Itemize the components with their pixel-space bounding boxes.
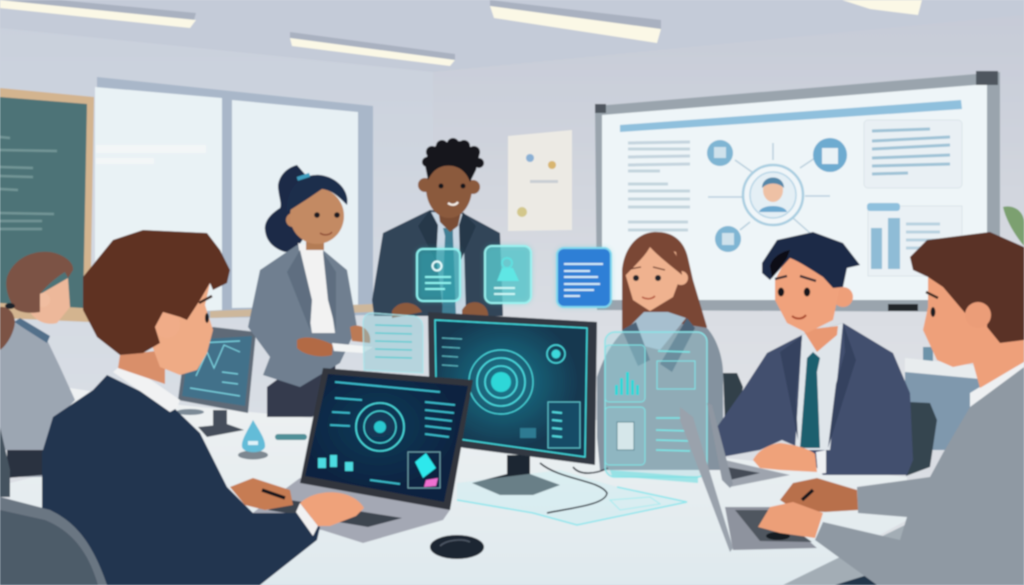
slide bar chart bbox=[867, 203, 962, 276]
back hand with pen bbox=[230, 478, 293, 510]
slide network diagram bbox=[707, 138, 847, 252]
whiteboard bbox=[595, 71, 1000, 312]
poster on wall bbox=[508, 130, 572, 231]
front hand on keyboard bbox=[296, 492, 364, 536]
mouse bbox=[430, 535, 484, 559]
right front laptop bbox=[680, 407, 817, 552]
floating card: lock bbox=[485, 246, 531, 303]
water drop icon bbox=[238, 420, 307, 460]
person: standing man with curly hair bbox=[372, 138, 503, 318]
chalkboard bbox=[0, 88, 94, 322]
slide text box bbox=[864, 120, 962, 188]
floating holographic panel bbox=[605, 332, 707, 483]
floating card: text translucent bbox=[363, 313, 423, 373]
foreground chair bbox=[0, 497, 107, 585]
monitor cable bbox=[540, 463, 608, 513]
person: far left seated woman bbox=[0, 252, 75, 497]
slide banner bbox=[620, 100, 962, 132]
person: right foreground man bbox=[758, 232, 1024, 585]
chair backs bbox=[723, 373, 937, 476]
ceiling lights bbox=[0, 0, 922, 66]
right middle laptop bbox=[707, 403, 826, 488]
person: left foreground man bbox=[42, 230, 364, 585]
person: standing woman with ponytail bbox=[248, 165, 373, 417]
slide bullets bbox=[628, 142, 690, 230]
floating card: blue document bbox=[557, 248, 611, 307]
table bbox=[10, 388, 907, 585]
back counter bbox=[905, 347, 980, 450]
window bbox=[95, 77, 373, 320]
projected table hologram bbox=[457, 470, 687, 525]
small monitor left bbox=[176, 327, 256, 437]
monitor bbox=[428, 312, 597, 495]
laptop bbox=[243, 368, 473, 543]
plant bbox=[1003, 206, 1024, 246]
person: seated man with tie bbox=[717, 232, 913, 475]
person: seated woman behind monitor bbox=[597, 232, 723, 470]
floating card: person bbox=[417, 249, 460, 301]
